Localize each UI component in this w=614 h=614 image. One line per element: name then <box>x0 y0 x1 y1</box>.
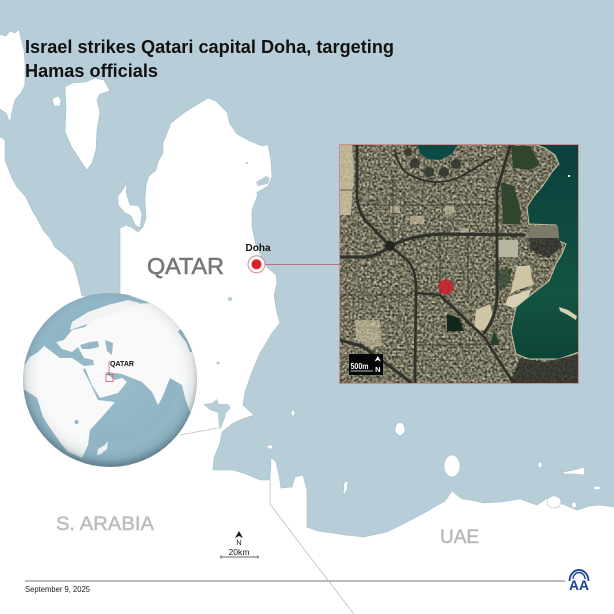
globe: location box and label <box>106 359 135 382</box>
land: Qatar west coast islands <box>118 182 142 228</box>
globe: far east sea <box>178 328 192 352</box>
marker: Doha <box>246 243 271 273</box>
country label: S. ARABIA: S. ARABIA <box>56 513 154 535</box>
satellite: sand and open ground <box>339 144 533 347</box>
country label: QATAR: QATAR <box>147 253 224 279</box>
footer rule <box>25 580 565 582</box>
globe: ocean <box>23 293 197 467</box>
country label: UAE: UAE <box>440 526 479 548</box>
globe: shading <box>23 293 197 467</box>
satellite: main roads <box>339 146 524 384</box>
map: inland water and bays <box>203 162 270 429</box>
satellite: palm compound rings <box>404 148 461 177</box>
scale and north arrow <box>221 531 258 558</box>
globe: Scandinavia and Arctic land <box>70 300 140 330</box>
inset: globe locator <box>15 293 205 467</box>
satellite: scale legend <box>349 354 383 375</box>
satellite: sea and lagoons <box>417 144 579 359</box>
satellite: scale legend: 500m <box>350 361 369 371</box>
logo: AA <box>569 570 589 593</box>
satellite: strike location <box>438 280 454 294</box>
satellite: towers and high-rise districts <box>510 226 579 384</box>
title <box>25 37 394 81</box>
date: September 9, 2025 <box>25 584 90 594</box>
land: Bahrain <box>65 78 110 170</box>
land: Saudi coast north <box>0 29 25 123</box>
connector line: Doha to satellite image <box>265 264 340 266</box>
globe: land <box>15 295 205 458</box>
globe: Madagascar <box>97 441 108 455</box>
title: Hamas officials <box>25 61 158 81</box>
logo: AA: AA <box>569 577 589 593</box>
satellite: urban texture <box>339 144 579 384</box>
globe leader line <box>180 428 218 435</box>
panel: satellite image of Doha <box>339 144 579 384</box>
satellite border <box>340 144 578 384</box>
scale and north arrow: N <box>236 538 242 547</box>
marker: Doha: Doha <box>246 243 271 254</box>
land: islands in the gulf <box>395 422 405 436</box>
globe: Mediterranean, Black Sea, Caspian <box>43 340 113 424</box>
map: borders <box>270 480 354 614</box>
title: Israel strikes Qatari capital Doha, targeting <box>25 37 394 57</box>
land: Bahrain islet <box>52 96 61 106</box>
globe: location box and label: QATAR <box>110 359 135 368</box>
satellite: scale legend: N <box>375 365 381 374</box>
scale and north arrow: 20km <box>228 548 250 557</box>
satellite: vegetation <box>447 146 540 345</box>
